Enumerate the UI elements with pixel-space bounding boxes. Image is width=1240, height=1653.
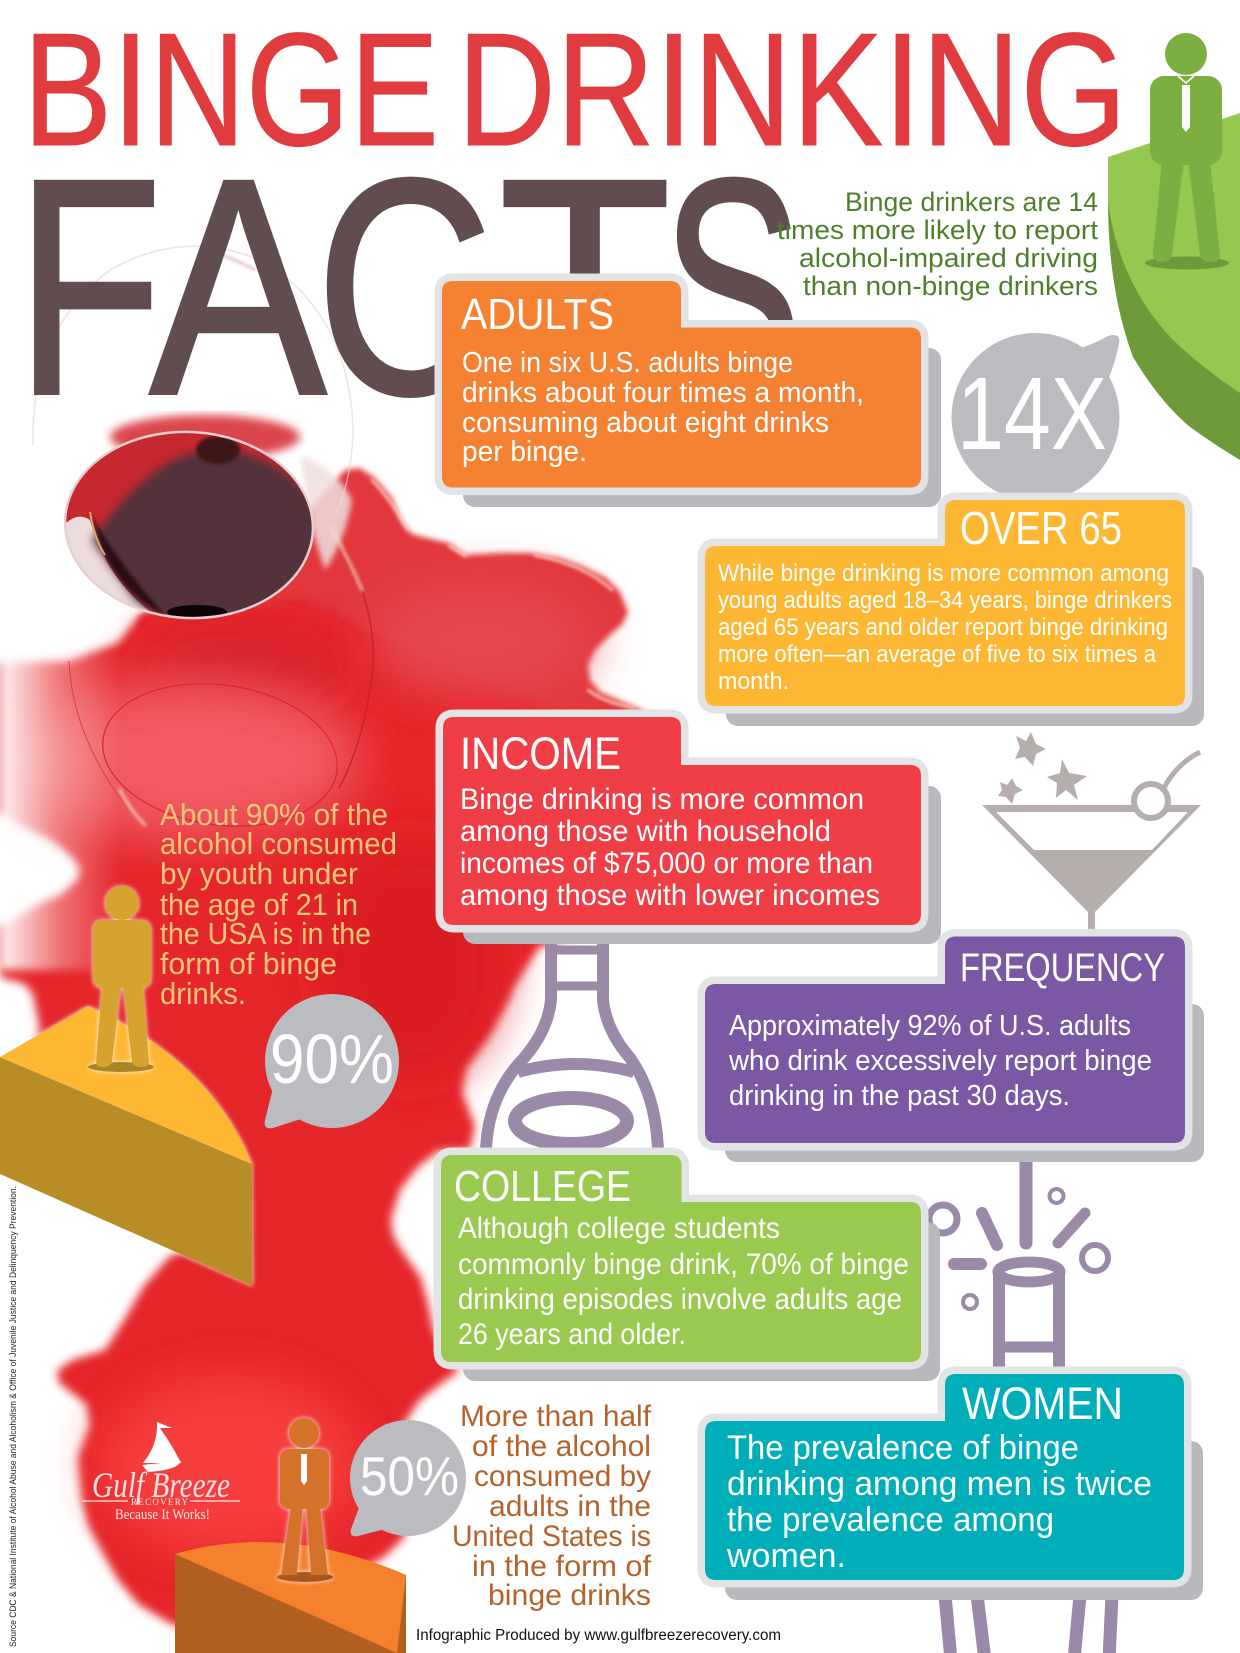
panel: frequency (705, 936, 1204, 1162)
body text: income: among those with lower incomes (460, 879, 880, 912)
body text: over 65: While binge drinking is more common among (718, 560, 1169, 587)
orange statistic text: of the alcohol (472, 1430, 651, 1463)
body text: adults: per binge. (462, 436, 587, 468)
panel: women (705, 1374, 1203, 1600)
panel: college (441, 1155, 940, 1381)
yellow statistic text: drinks. (160, 976, 246, 1011)
orange statistic text: consumed by (474, 1460, 651, 1493)
yellow statistic text: form of binge (160, 946, 337, 981)
credit line: Infographic Produced by www.gulfbreezerecovery.com (416, 1627, 781, 1644)
body text: over 65: aged 65 years and older report binge drinking (718, 614, 1168, 641)
body text: college: Although college students (458, 1212, 780, 1245)
icon: wine bottle (486, 940, 658, 1150)
green statistic text (777, 187, 1099, 301)
body text: income: Binge drinking is more common (460, 783, 864, 816)
green statistic text: alcohol-impaired driving (799, 243, 1098, 273)
title: BINGE DRINKING: BINGE (23, 0, 439, 180)
green statistic text: times more likely to report (777, 215, 1099, 245)
body text: women: The prevalence of binge (727, 1429, 1079, 1467)
body text: over 65: more often—an average of five to six times a (718, 641, 1157, 668)
body text: college: 26 years and older. (458, 1318, 686, 1351)
yellow statistic text: About 90% of the (160, 797, 388, 832)
logo: Gulf Breeze Recovery: Gulf Breeze (92, 1465, 230, 1505)
yellow statistic text: alcohol consumed (160, 826, 397, 861)
speech bubble: 90%: 90% (270, 1020, 394, 1098)
heading: over 65: OVER 65 (960, 502, 1122, 554)
yellow statistic text: the age of 21 in (160, 887, 358, 922)
speech bubble: 14X: 14X (957, 356, 1107, 471)
speech bubble: 14X (952, 333, 1120, 501)
yellow statistic text: the USA is in the (160, 916, 371, 951)
heading: frequency: FREQUENCY (960, 946, 1165, 990)
body text: frequency (728, 1010, 1152, 1112)
icon: popped champagne bottle (929, 1162, 1108, 1375)
panel: adults (442, 281, 941, 507)
orange statistic text: United States is (452, 1520, 651, 1553)
orange statistic text: in the form of (472, 1550, 652, 1583)
body text: over 65 (718, 560, 1172, 695)
body text: income: incomes of $75,000 or more than (460, 847, 873, 880)
body text: income (460, 783, 880, 912)
yellow wedge platform (0, 1006, 252, 1286)
title: BINGE DRINKING: DRINKING (457, 0, 1127, 180)
panel: over 65 (705, 500, 1204, 726)
body text: over 65: month. (718, 668, 789, 695)
yellow statistic text (160, 797, 397, 1011)
body text: college: commonly binge drink, 70% of binge (458, 1248, 909, 1281)
body text: women: women. (726, 1537, 846, 1575)
body text: women: the prevalence among (727, 1501, 1054, 1539)
orange statistic text (452, 1400, 652, 1612)
speech bubble: 50%: 50% (360, 1445, 459, 1507)
body text: over 65: young adults aged 18–34 years, binge drinkers (718, 587, 1172, 614)
body text: adults: One in six U.S. adults binge (462, 347, 793, 379)
body text: college: drinking episodes involve adults age (458, 1283, 902, 1316)
wine spill (0, 468, 660, 1626)
green wedge platform (1108, 113, 1240, 460)
body text: college (458, 1212, 909, 1351)
orange statistic text: binge drinks (488, 1579, 651, 1612)
body text: frequency: Approximately 92% of U.S. adults (729, 1010, 1131, 1042)
title: FACTS: S (662, 116, 802, 459)
body text: adults (462, 347, 864, 468)
orange businessman icon (277, 1418, 333, 1582)
green statistic text: Binge drinkers are 14 (845, 187, 1098, 217)
logo: Gulf Breeze Recovery: RECOVERY (131, 1497, 188, 1507)
title: FACTS: A (150, 116, 327, 459)
wine glass (33, 246, 353, 625)
body text: women: drinking among men is twice (727, 1465, 1152, 1503)
green statistic text: than non-binge drinkers (803, 271, 1098, 301)
title: FACTS: T (499, 116, 671, 459)
orange statistic text: adults in the (489, 1490, 651, 1523)
logo: Gulf Breeze Recovery: Because It Works! (115, 1507, 210, 1523)
orange wedge platform (175, 1542, 406, 1653)
speech bubble: 50% (350, 1420, 466, 1536)
body text: frequency: drinking in the past 30 days. (729, 1080, 1070, 1112)
title: FACTS: C (316, 116, 493, 459)
body text: women (726, 1429, 1152, 1575)
heading: adults: ADULTS (461, 290, 614, 339)
icon: bottle legs below women panel (945, 1595, 1112, 1653)
body text: frequency: who drink excessively report binge (728, 1045, 1152, 1077)
body text: income: among those with household (460, 815, 831, 848)
logo: Gulf Breeze Recovery (82, 1422, 240, 1523)
panel: income (443, 717, 941, 944)
green businessman icon (1145, 33, 1229, 270)
body text: adults: drinks about four times a month, (462, 377, 864, 409)
source note: Source CDC & National Institute of Alcohol Abuse and Alcoholism & Office of Juvenile Justice and Delinquency Prevention. (8, 1186, 19, 1647)
orange statistic text: More than half (460, 1400, 652, 1433)
heading: women: WOMEN (962, 1378, 1123, 1429)
icon: martini glass (982, 732, 1201, 930)
speech bubble: 90% (265, 994, 399, 1128)
heading: income: INCOME (460, 728, 621, 779)
yellow statistic text: by youth under (160, 856, 358, 891)
body text: adults: consuming about eight drinks (462, 407, 829, 439)
gold person icon (88, 886, 154, 1072)
title: BINGE DRINKING (23, 0, 1127, 180)
title: FACTS: F (16, 116, 162, 459)
heading: college: COLLEGE (454, 1162, 631, 1211)
